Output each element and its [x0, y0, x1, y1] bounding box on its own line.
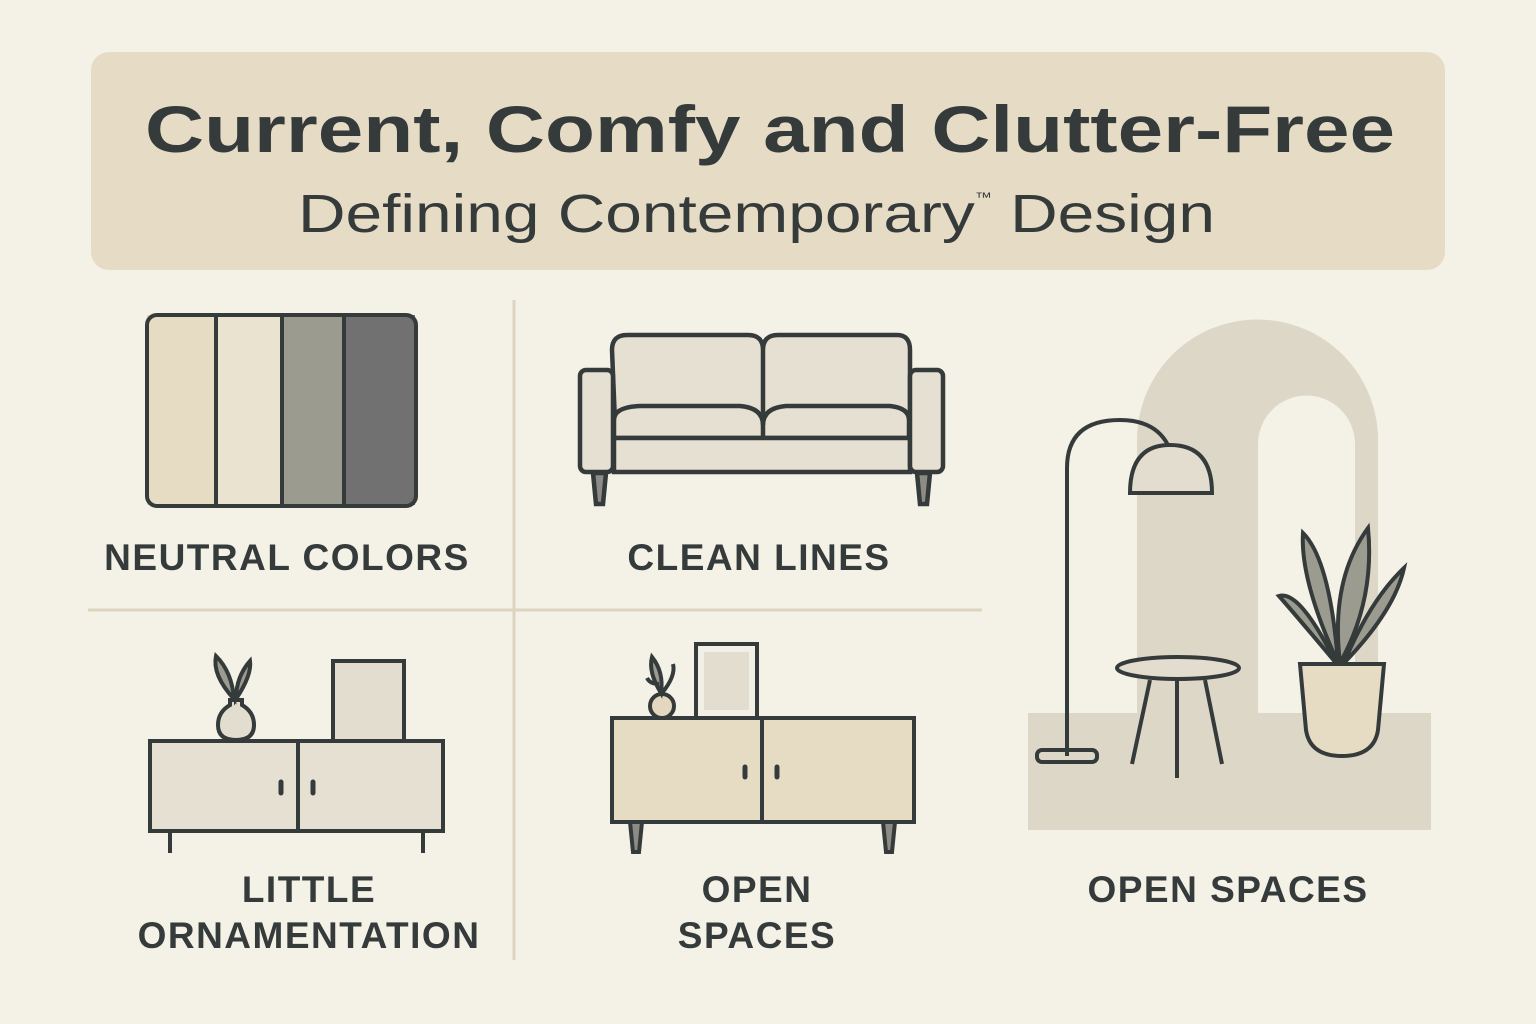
title: Current, Comfy and Clutter-Free	[145, 92, 1395, 166]
subtitle: Design	[992, 184, 1215, 244]
side table	[1117, 657, 1239, 778]
icon: sideboard with vase and frame	[150, 656, 443, 853]
subtitle: ™	[975, 189, 992, 205]
subtitle: Defining Contemporary	[298, 184, 853, 244]
label: open spaces: OPEN	[702, 869, 812, 910]
lamp	[1037, 420, 1212, 762]
title banner	[91, 52, 1445, 270]
potted plant	[1279, 528, 1404, 756]
icon: beige sideboard	[612, 644, 914, 852]
label: clean lines: CLEAN LINES	[627, 537, 891, 578]
label: open spaces: SPACES	[678, 915, 836, 956]
label: little ornamentation: LITTLE	[242, 869, 376, 910]
icon: color palette	[147, 315, 416, 506]
icon: sofa	[580, 335, 943, 504]
illustration: room scene	[1028, 320, 1431, 830]
label: neutral colors: NEUTRAL COLORS	[104, 537, 470, 578]
label: little ornamentation: ORNAMENTATION	[138, 915, 480, 956]
label: open spaces right: OPEN SPACES	[1087, 869, 1369, 910]
